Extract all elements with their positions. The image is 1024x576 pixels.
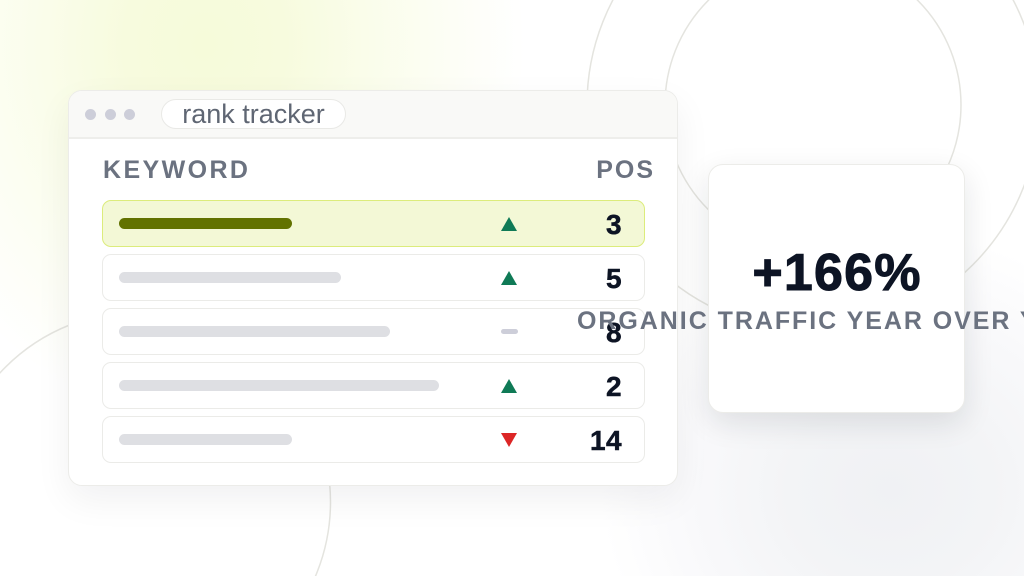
keyword bar <box>119 380 439 391</box>
window title bar <box>69 91 677 139</box>
address pill: rank tracker: rank tracker <box>182 99 325 129</box>
position: 3 <box>606 209 622 240</box>
keyword bar <box>119 272 341 283</box>
row 4 <box>102 362 645 409</box>
window dot 1 <box>85 109 96 120</box>
window dot 3 <box>124 109 135 120</box>
icon: neutral dash <box>501 329 518 334</box>
position: 5 <box>606 263 622 294</box>
stat value: +166% <box>752 244 922 302</box>
panel: stat card <box>708 164 965 413</box>
keyword bar <box>119 218 292 229</box>
panel: rank tracker window <box>68 90 678 486</box>
icon: up arrow <box>501 271 517 285</box>
column heading: keyword: KEYWORD <box>103 156 250 184</box>
column heading: position: POS <box>596 156 655 184</box>
position: 8 <box>606 317 622 348</box>
window dot 2 <box>105 109 116 120</box>
keyword bar <box>119 434 292 445</box>
row 1 highlighted <box>102 200 645 247</box>
row 2 <box>102 254 645 301</box>
position: 2 <box>606 371 622 402</box>
row 5 <box>102 416 645 463</box>
icon: up arrow <box>501 217 517 231</box>
icon: up arrow <box>501 379 517 393</box>
icon: down arrow <box>501 433 517 447</box>
row 3 <box>102 308 645 355</box>
keyword bar <box>119 326 390 337</box>
position: 14 <box>590 425 622 456</box>
